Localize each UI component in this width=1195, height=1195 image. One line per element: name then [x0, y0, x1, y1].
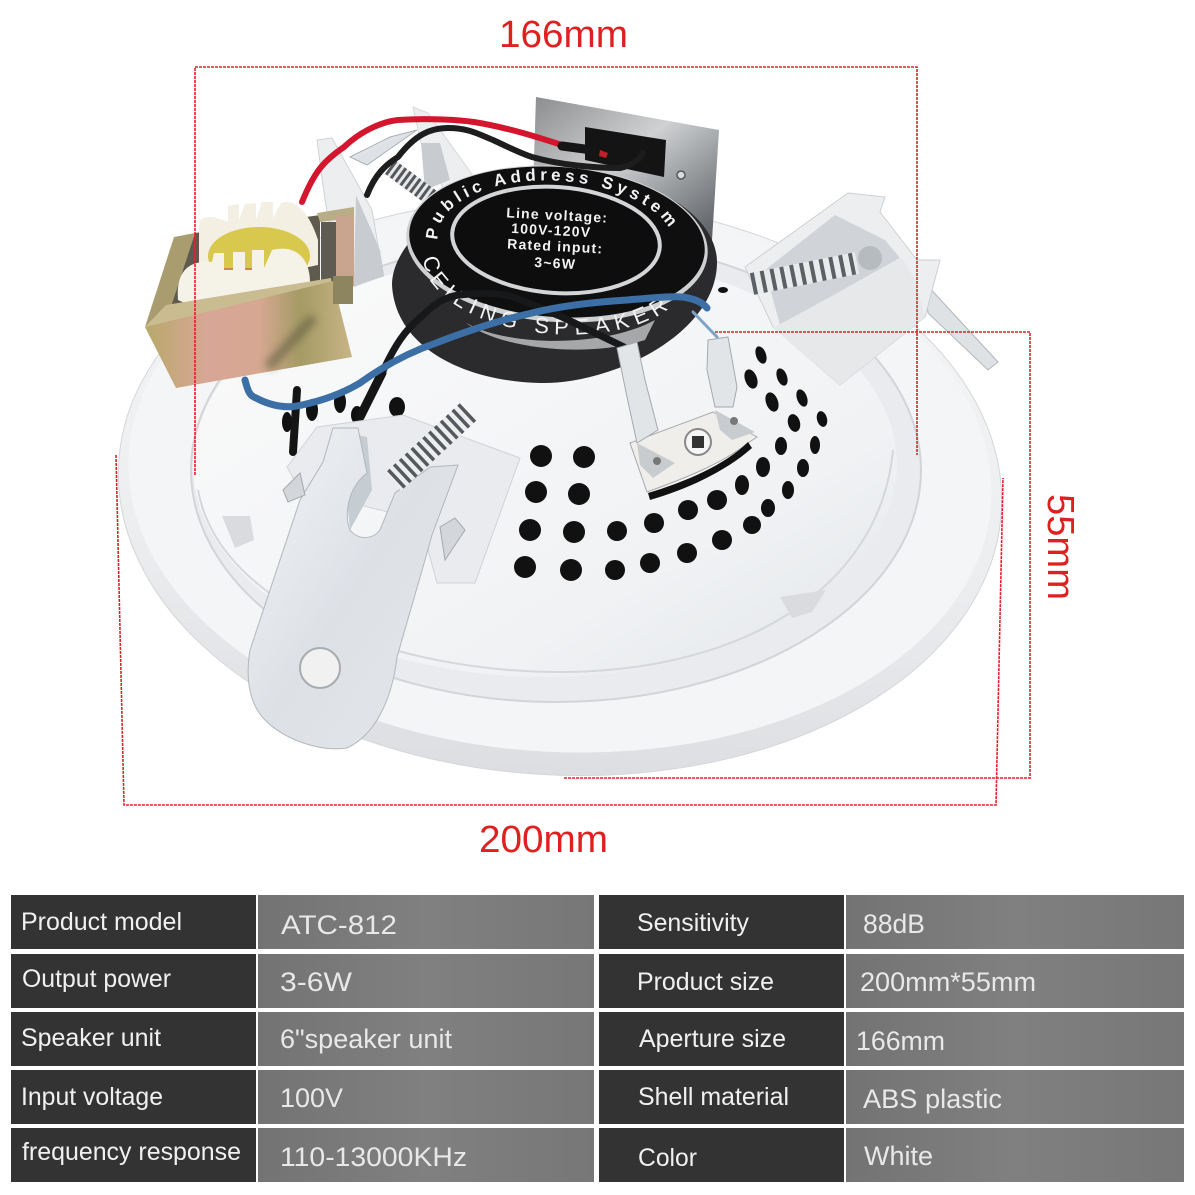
- rear clip bracket: [317, 107, 474, 400]
- label text: CEILING SPEAKER: [424, 256, 668, 335]
- mounting strap: [248, 428, 458, 749]
- left column: Speaker unit: [21, 1024, 161, 1052]
- speaker product photo: [118, 97, 1002, 776]
- label text: Rated input:: [507, 236, 604, 257]
- right column: White: [864, 1141, 933, 1171]
- perforated speaker dome: [193, 253, 897, 677]
- specification table: [11, 895, 1184, 1182]
- left column: [11, 895, 594, 1182]
- transformer: [145, 202, 354, 388]
- right spring clip: [745, 193, 998, 385]
- dimension 55mm: [563, 332, 1081, 778]
- right column: Color: [638, 1144, 697, 1172]
- label text: 3~6W: [534, 254, 577, 272]
- dimension 200mm: [116, 455, 1003, 861]
- left column: 3-6W: [280, 967, 353, 997]
- left column: Input voltage: [21, 1083, 163, 1111]
- left column: frequency response: [22, 1138, 241, 1166]
- wires: [245, 119, 717, 452]
- small mesh vents: [222, 516, 826, 618]
- right column: Sensitivity: [637, 909, 749, 937]
- right column: 200mm*55mm: [860, 967, 1036, 997]
- right column: Aperture size: [639, 1025, 786, 1053]
- right column: [599, 895, 1184, 1182]
- label text: [424, 168, 675, 335]
- label text: Line voltage:: [506, 204, 609, 226]
- right column: 166mm: [856, 1026, 945, 1056]
- dimension 166mm: 166mm: [499, 14, 628, 56]
- left column: 6"speaker unit: [280, 1024, 452, 1054]
- outer speaker rim: [104, 176, 1016, 798]
- ventilation holes: [282, 287, 829, 581]
- dimension 166mm: [195, 14, 917, 475]
- left column: Output power: [22, 965, 171, 993]
- dimension 200mm: 200mm: [479, 819, 608, 861]
- label text: Public Address System: [426, 168, 675, 239]
- left column: ATC-812: [281, 910, 397, 940]
- magnet and label: [392, 166, 717, 383]
- front spring clip: [248, 412, 520, 749]
- mounting plate with terminal: [532, 97, 719, 240]
- spade connectors: [617, 337, 757, 500]
- right column: 88dB: [863, 909, 925, 939]
- right column: ABS plastic: [863, 1084, 1002, 1114]
- right column: Shell material: [638, 1083, 789, 1111]
- left column: 110-13000KHz: [280, 1142, 467, 1172]
- dimension 55mm: 55mm: [1039, 494, 1081, 600]
- label text: 100V-120V: [511, 220, 592, 240]
- left column: 100V: [280, 1083, 343, 1113]
- right column: Product size: [637, 968, 774, 996]
- left column: Product model: [21, 908, 182, 936]
